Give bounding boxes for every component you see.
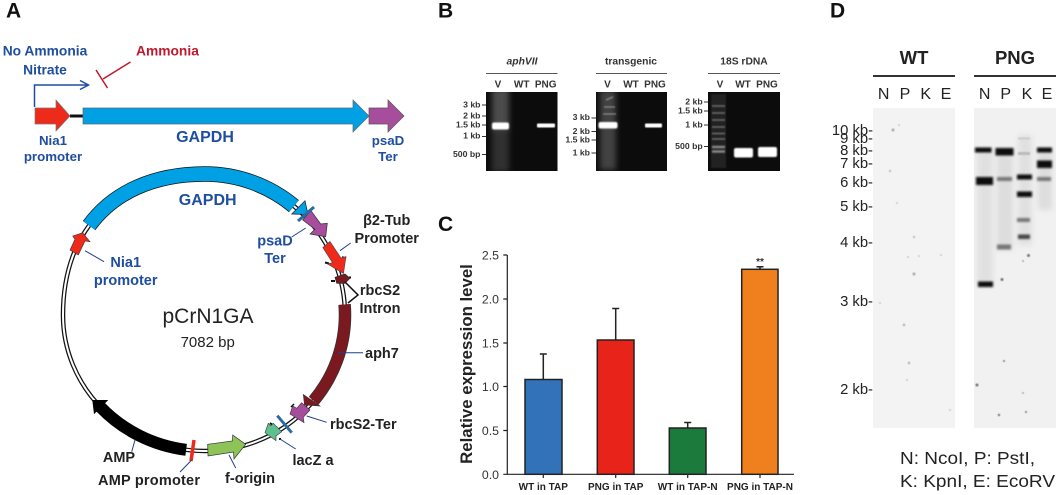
label: psaD Ter: psaD bbox=[372, 133, 405, 148]
gel title: transgenic bbox=[605, 56, 657, 68]
label: beta2-Tub Promoter: β2-Tub bbox=[363, 213, 410, 229]
bar: WT in TAP-N bbox=[669, 422, 706, 474]
label: aph7: aph7 bbox=[365, 346, 399, 362]
label: psaD Ter: psaD bbox=[257, 234, 293, 250]
y axis labels: 2.0 bbox=[482, 292, 499, 306]
inhibition bar bbox=[96, 62, 130, 88]
lane labels: WT bbox=[514, 80, 529, 90]
group label PNG: PNG bbox=[995, 47, 1035, 68]
label: AMP promoter: AMP promoter bbox=[98, 473, 200, 489]
plasmid ring bbox=[63, 174, 345, 451]
enzyme legend: K: KpnI, E: EcoRV bbox=[900, 471, 1055, 491]
y axis labels: 2.5 bbox=[482, 248, 499, 262]
lane labels: WT bbox=[623, 80, 639, 90]
lane labels: PNG bbox=[535, 80, 557, 90]
blot: WT bbox=[873, 108, 955, 428]
x axis labels: PNG in TAP-N bbox=[727, 482, 793, 493]
blot: PNG bbox=[974, 108, 1056, 428]
size markers: 1.5 kb bbox=[565, 135, 590, 145]
arrow: GAPDH bbox=[83, 100, 369, 132]
size labels: 7 kb- bbox=[840, 156, 873, 172]
size markers: 1.5 kb bbox=[456, 120, 480, 130]
label: Nia1 promoter: Nia1 bbox=[39, 133, 68, 148]
arrow: Nia1 promoter bbox=[35, 100, 70, 131]
x axis labels: WT in TAP-N bbox=[658, 482, 718, 493]
size labels: 10 kb- bbox=[832, 123, 873, 139]
site tick: lacZ bbox=[277, 416, 292, 433]
bar: WT in TAP bbox=[525, 354, 562, 474]
size labels: 8 kb- bbox=[840, 143, 873, 159]
gel title: aphVII bbox=[507, 56, 539, 68]
size markers: 2 kb bbox=[573, 126, 590, 136]
lane labels: V bbox=[717, 80, 724, 90]
label: AMP: AMP bbox=[103, 450, 135, 466]
arrow: induction bbox=[34, 80, 88, 107]
significance mark: ** bbox=[756, 257, 764, 268]
arrow: beta2-Tub promoter bbox=[323, 242, 351, 281]
lane letters: K bbox=[920, 86, 931, 103]
arrow: Nia1 promoter bbox=[70, 233, 90, 255]
size labels: 3 kb- bbox=[840, 294, 873, 310]
panel C: bar chart bbox=[438, 213, 794, 493]
lane letters: P bbox=[1000, 86, 1011, 103]
panel label D: D bbox=[830, 0, 845, 22]
intron connector bbox=[345, 282, 358, 303]
bar: PNG in TAP bbox=[597, 308, 634, 474]
label: psaD Ter: Ter bbox=[264, 251, 286, 267]
size labels: 5 kb- bbox=[840, 199, 873, 215]
y axis labels: 1.5 bbox=[482, 336, 499, 350]
enzyme legend: N: NcoI, P: PstI, bbox=[900, 448, 1035, 468]
panel label B: B bbox=[438, 0, 453, 22]
size markers: 1.5 kb bbox=[678, 105, 703, 115]
y axis labels: 0.5 bbox=[482, 424, 499, 438]
label: Nia1 promoter: Nia1 bbox=[110, 255, 141, 271]
y axis title: Relative expression level bbox=[457, 264, 476, 464]
size markers: 3 kb bbox=[573, 112, 590, 122]
label: Ammonia: Ammonia bbox=[136, 44, 199, 58]
plasmid name: pCrN1GA bbox=[162, 305, 254, 328]
panel B: PCR gels bbox=[438, 0, 780, 172]
lane labels: V bbox=[495, 80, 502, 90]
label: Nia1 promoter: promoter bbox=[94, 273, 158, 289]
linker bbox=[70, 114, 83, 118]
size markers: 2 kb bbox=[463, 111, 480, 121]
label: lacZ a: lacZ a bbox=[292, 453, 334, 469]
x axis labels: PNG in TAP bbox=[588, 482, 644, 493]
y axis labels: 0.0 bbox=[482, 468, 499, 482]
label: f-origin: f-origin bbox=[225, 471, 275, 487]
linear construct bbox=[3, 44, 405, 164]
label: rbcS2 Intron: Intron bbox=[359, 301, 401, 317]
leader lines bbox=[85, 228, 363, 472]
lane letters: E bbox=[1042, 86, 1052, 103]
size markers: 2 kb bbox=[685, 96, 703, 106]
label: beta2-Tub Promoter: Promoter bbox=[354, 231, 419, 247]
lane letters: N bbox=[878, 86, 889, 103]
arc: GAPDH bbox=[63, 174, 345, 451]
size markers: 3 kb bbox=[463, 100, 480, 110]
gel: transgenic bbox=[565, 56, 667, 171]
lane letters: N bbox=[979, 86, 990, 103]
label: psaD Ter: Ter bbox=[378, 149, 398, 164]
lane letters: P bbox=[900, 86, 910, 103]
gel title: 18S rDNA bbox=[720, 56, 768, 68]
gel: 18S rDNA bbox=[675, 56, 780, 171]
x axis labels: WT in TAP bbox=[519, 482, 568, 493]
axes bbox=[503, 255, 794, 478]
size markers: 500 bp bbox=[675, 141, 703, 151]
arrow: rbcS2 terminator bbox=[290, 403, 310, 423]
plasmid map bbox=[63, 174, 419, 489]
arrow: psaD terminator bbox=[369, 100, 404, 132]
label: rbcS2 Intron: rbcS2 bbox=[360, 283, 400, 299]
size markers: 1 kb bbox=[685, 120, 703, 130]
lane labels: V bbox=[604, 80, 611, 90]
label: GAPDH: GAPDH bbox=[176, 129, 234, 146]
label: No Ammonia Nitrate: No Ammonia bbox=[3, 44, 88, 58]
group label WT: WT bbox=[900, 47, 929, 68]
y axis labels: 1.0 bbox=[482, 380, 499, 394]
arrow: rbcS2 intron start bbox=[335, 274, 350, 283]
lane letters: E bbox=[941, 86, 951, 103]
label: Nia1 promoter: promoter bbox=[24, 149, 82, 164]
panel label A: A bbox=[6, 0, 21, 22]
lane letters: K bbox=[1022, 86, 1033, 103]
gel: aphVII bbox=[453, 56, 558, 172]
size labels: 6 kb- bbox=[840, 175, 873, 191]
size labels: 2 kb- bbox=[840, 382, 873, 398]
label: rbcS2-Ter: rbcS2-Ter bbox=[330, 417, 397, 433]
lane labels: PNG bbox=[644, 80, 666, 90]
marker: AMP promoter bbox=[191, 440, 194, 461]
size markers: 500 bp bbox=[453, 149, 480, 159]
arrow: f-origin bbox=[208, 435, 246, 459]
panel D: Southern blot bbox=[830, 0, 1056, 491]
arrow: lacZ a bbox=[265, 423, 282, 441]
label: GAPDH: GAPDH bbox=[179, 192, 237, 209]
plasmid size: 7082 bp bbox=[181, 334, 235, 351]
size labels: 4 kb- bbox=[840, 235, 873, 251]
bar: PNG in TAP-N bbox=[742, 267, 778, 474]
arc: aph7 bbox=[63, 174, 345, 451]
size markers: 1 kb bbox=[463, 131, 480, 141]
size markers: 1 kb bbox=[573, 148, 590, 158]
panel A: gene construct and plasmid map bbox=[3, 0, 419, 489]
size labels: 9 kb- bbox=[840, 131, 873, 147]
panel label C: C bbox=[438, 213, 453, 236]
label: No Ammonia Nitrate: Nitrate bbox=[23, 62, 67, 78]
lane labels: PNG bbox=[756, 80, 778, 90]
lane labels: WT bbox=[735, 80, 751, 90]
site tick: psaD bbox=[298, 207, 314, 221]
arc: AMP bbox=[63, 174, 345, 451]
arrow: psaD terminator bbox=[303, 211, 327, 237]
